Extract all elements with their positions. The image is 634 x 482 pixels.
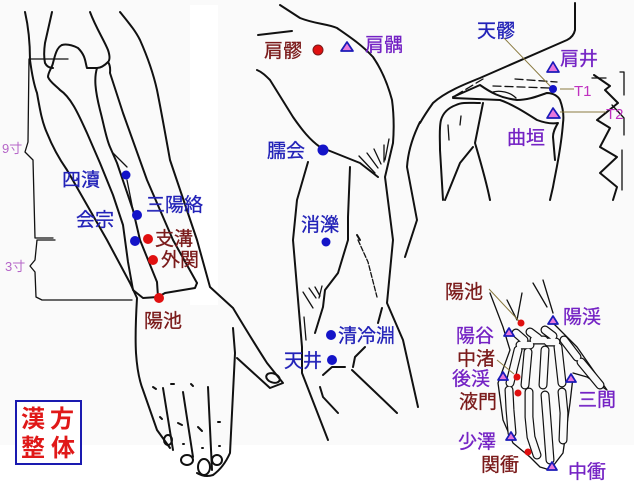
measure bracket: 3 cun	[5, 240, 132, 300]
hand acupoints	[498, 316, 576, 470]
shoulder labels: 肩井	[560, 48, 598, 70]
shoulder labels: 曲垣	[507, 127, 545, 149]
hand labels: 陽谷	[456, 325, 494, 347]
shoulder labels: T2	[606, 106, 624, 123]
shoulder drawing	[420, 3, 624, 200]
upper arm labels: 臑会	[267, 140, 305, 162]
shoulder acupoints and leader lines	[504, 38, 606, 118]
forearm labels: 三陽絡	[146, 194, 203, 216]
hand labels	[445, 281, 616, 482]
forearm labels: 会宗	[76, 209, 114, 231]
forearm labels: 支溝	[155, 228, 193, 250]
upper arm labels: 消濼	[301, 214, 339, 236]
middle arm drawing	[257, 5, 420, 440]
measure bracket: 9 cun: 9寸	[2, 141, 22, 156]
shoulder labels: 天髎	[477, 21, 515, 42]
hand labels: 少澤	[458, 431, 496, 453]
upper arm acupoints	[313, 42, 353, 365]
forearm labels: 陽池	[144, 310, 182, 332]
logo stamp: 整	[21, 435, 45, 462]
logo stamp	[16, 401, 81, 464]
left arm drawing	[25, 12, 283, 476]
hand labels: 陽渓	[563, 306, 601, 328]
logo stamp: 体	[51, 435, 75, 462]
upper arm labels	[264, 35, 403, 372]
acupoints on forearm	[122, 170, 164, 303]
hand labels: 三間	[578, 390, 616, 411]
upper arm labels: 天井	[284, 350, 322, 372]
shoulder labels	[477, 21, 624, 149]
forearm labels: 四瀆	[62, 169, 100, 191]
logo stamp: 方	[50, 406, 74, 433]
upper arm labels: 清冷淵	[338, 325, 395, 347]
hand labels: 陽池	[445, 281, 483, 303]
upper arm labels: 肩髃	[365, 35, 403, 56]
forearm labels	[62, 169, 203, 332]
forearm labels: 外関	[161, 249, 199, 271]
measure bracket: 3 cun: 3寸	[5, 259, 25, 274]
hand skeleton drawing	[489, 280, 607, 470]
hand labels: 関衝	[481, 454, 519, 476]
hand labels: 液門	[459, 391, 497, 413]
hand labels: 後渓	[452, 368, 490, 390]
hand labels: 中渚	[457, 348, 495, 370]
shoulder labels: T1	[574, 83, 592, 100]
measure bracket: 9 cun	[2, 59, 68, 238]
logo stamp: 漢	[21, 406, 45, 433]
upper arm labels: 肩髎	[264, 41, 302, 62]
